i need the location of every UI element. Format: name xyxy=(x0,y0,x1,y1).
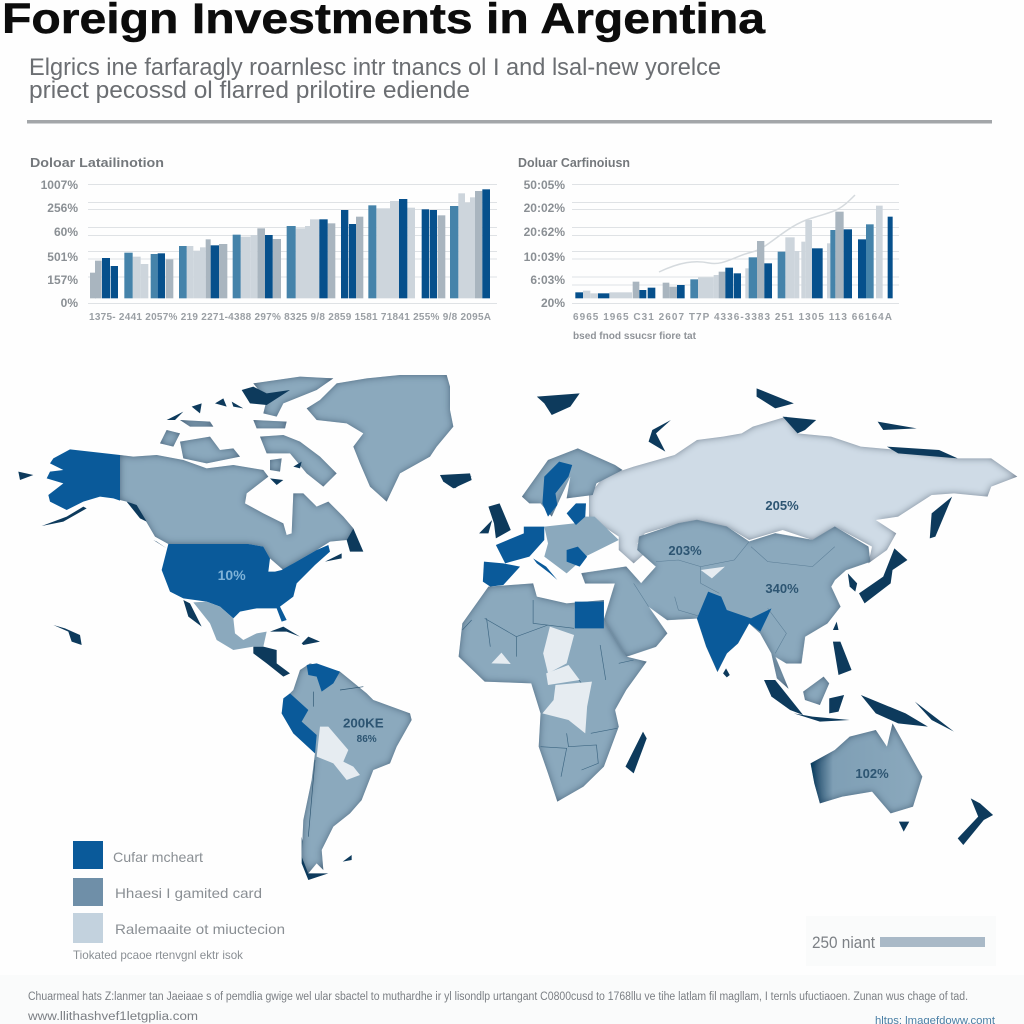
map: western hemisphere xyxy=(18,375,472,880)
Africa xyxy=(459,583,647,802)
Peru xyxy=(282,693,317,753)
right chart x labels: 6965 1965 C31 2607 T7P 4336-3383 251 1305 113 66164A xyxy=(573,312,892,323)
footer xyxy=(0,975,1024,1024)
legend labels: Tiokated pcaoe rtenvgnl ektr isok xyxy=(73,948,244,962)
right chart note: bsed fnod ssucsr fiore tat xyxy=(573,331,697,342)
right chart axis labels: 20% xyxy=(541,296,565,310)
legend labels: Hhaesi I gamited card xyxy=(115,885,262,901)
right chart axis labels: 50:05% xyxy=(524,178,565,192)
left chart axis labels: 0% xyxy=(61,296,78,310)
Arctic Canada islands xyxy=(160,377,337,487)
Eastern Europe xyxy=(544,517,619,573)
world map xyxy=(18,375,1017,880)
legend labels: Ralemaaite ot miuctecion xyxy=(115,921,285,937)
Brazil value xyxy=(343,715,384,745)
subtitle xyxy=(29,54,721,104)
map: eastern hemisphere xyxy=(440,388,1017,845)
map value labels: Eurasia and Australia: 205% xyxy=(765,498,799,513)
left chart axis labels xyxy=(41,178,78,310)
Australia xyxy=(811,723,922,813)
Africa borders xyxy=(462,600,634,777)
Canada xyxy=(120,455,353,570)
left chart axis labels: 1007% xyxy=(41,178,78,192)
legend xyxy=(73,841,285,962)
Greenland xyxy=(307,375,453,502)
dark islands and coasts xyxy=(18,387,472,880)
map value labels: Eurasia and Australia: 203% xyxy=(668,543,702,558)
USA value: 10% xyxy=(218,567,246,583)
left chart axis labels: 157% xyxy=(47,273,78,287)
Brazil value: 200KE xyxy=(343,715,384,730)
left chart x labels: 1375- 2441 2057% 219 2271-4388 297% 8325 9/8 2859 1581 71841 255% 9/8 2095A xyxy=(89,312,491,323)
right chart axis labels: 10:03% xyxy=(524,250,565,264)
legend labels: Cufar mcheart xyxy=(113,849,203,865)
legend labels xyxy=(73,849,285,962)
left chart bars xyxy=(90,189,490,298)
Borneo xyxy=(803,677,829,705)
South America xyxy=(282,663,412,873)
Alaska xyxy=(47,449,120,510)
Scandinavia xyxy=(522,448,623,517)
map value labels: Eurasia and Australia xyxy=(668,498,889,781)
Central, South and East Asia xyxy=(582,520,870,688)
panel: left bar chart xyxy=(30,155,497,323)
Venezuela xyxy=(307,663,340,692)
pale Tibet patch xyxy=(701,567,725,578)
Sweden xyxy=(542,462,572,517)
right chart bars xyxy=(575,206,893,298)
Egypt xyxy=(575,602,604,628)
subtitle: priect pecossd ol flarred prilotire ediende xyxy=(29,77,470,104)
chart heading: left: Doloar Latailinotion xyxy=(30,155,164,170)
UK and Ireland xyxy=(479,503,511,538)
footer: www.llithashvef1letgplia.com xyxy=(27,1011,198,1023)
pale African states xyxy=(491,627,592,733)
right chart axis labels: 6:03% xyxy=(530,273,565,287)
right chart axis labels xyxy=(524,178,565,310)
scale bar: 250 niant xyxy=(812,933,875,952)
India xyxy=(697,592,771,672)
scale bar xyxy=(806,916,996,966)
subtitle: Elgrics ine farfaragly roarnlesc intr tnancs ol I and lsal-new yorelce xyxy=(29,54,721,81)
chart heading: right: Doluar Carfinoiusn xyxy=(518,155,630,170)
panel: right bar chart xyxy=(518,155,899,342)
map value labels: Eurasia and Australia: 340% xyxy=(765,581,799,596)
Bolivia and Paraguay xyxy=(317,727,360,780)
Arctic and island shapes xyxy=(440,388,993,845)
right chart trend line xyxy=(659,195,855,272)
left chart axis labels: 256% xyxy=(47,201,78,215)
left chart axis labels: 501% xyxy=(47,250,78,264)
right chart axis labels: 20:02% xyxy=(524,201,565,215)
Russia xyxy=(589,417,1017,563)
USA xyxy=(162,544,330,622)
left chart axis labels: 60% xyxy=(54,225,78,239)
right chart axis labels: 20:62% xyxy=(524,225,565,239)
Western Europe xyxy=(483,503,587,587)
map value labels: Eurasia and Australia: 102% xyxy=(855,766,889,781)
Mexico xyxy=(193,602,267,650)
Brazil value: 86% xyxy=(357,734,377,745)
